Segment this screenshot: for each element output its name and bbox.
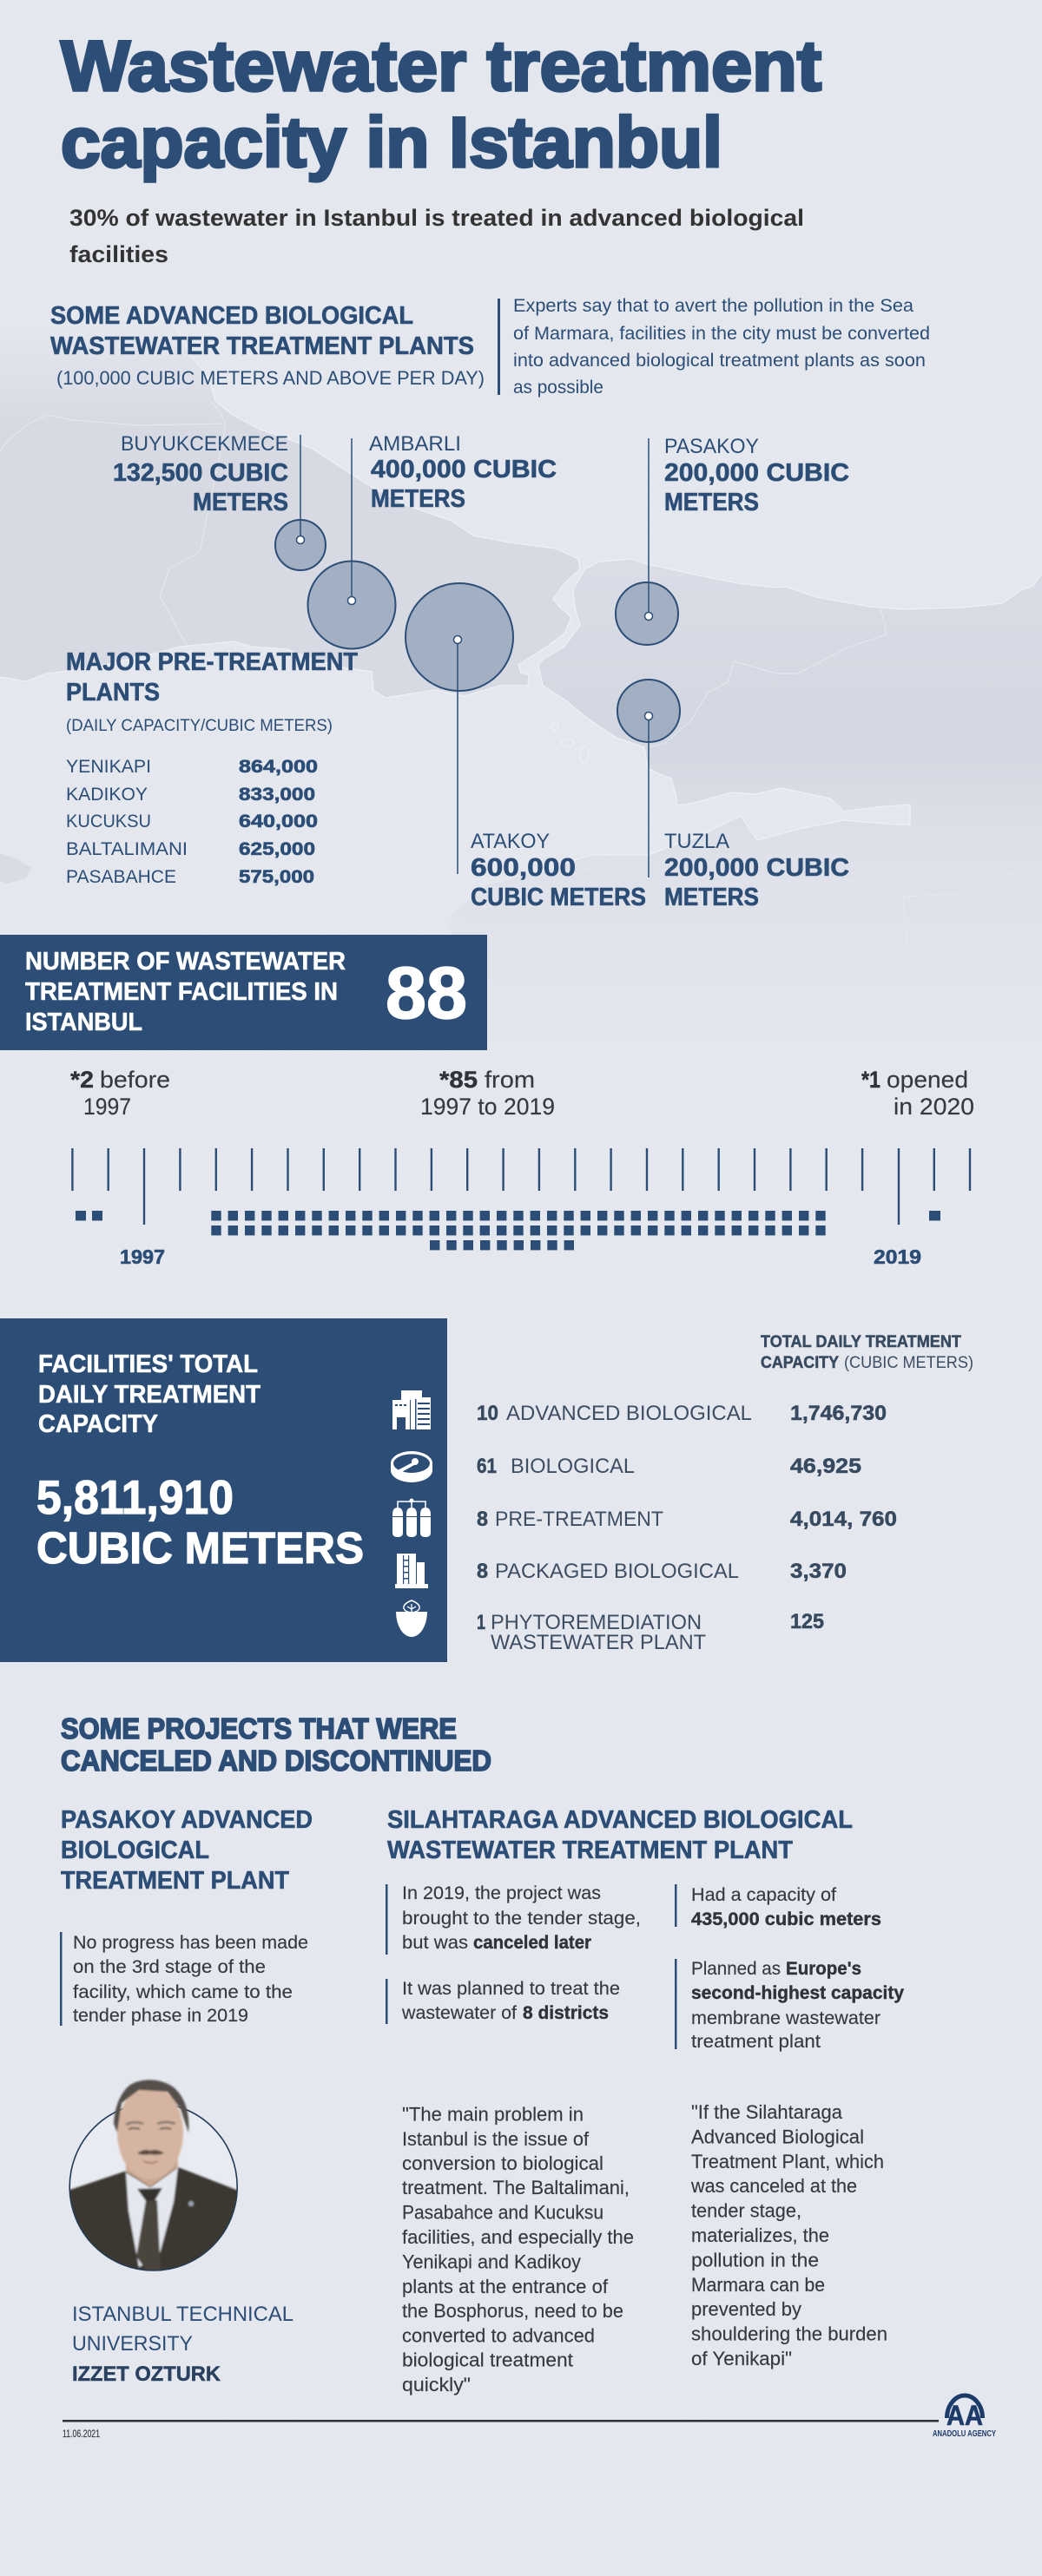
text: 8 districts: It was planned to treat the: [402, 1978, 620, 1999]
text: Europe's second-highest: [675, 1958, 904, 2052]
map: Istanbul region: [0, 321, 1042, 1059]
label: Atakoy: [471, 830, 646, 911]
heading: Silahtaraga plant: SILAHTARAGA ADVANCED BIOLOGICAL: [387, 1806, 853, 1834]
text: tender stage: but was: [402, 1932, 468, 1953]
icon: packaged biological tower: [395, 1554, 428, 1588]
text: Europe's second-highest: membrane wastewater: [691, 2008, 880, 2028]
label: Tuzla: TUZLA: [664, 830, 730, 853]
panel: Pasakoy project: [60, 1806, 313, 2026]
label: Pasakoy: 200,000 CUBIC: [664, 459, 849, 487]
label: 1 opened in 2020: in 2020: [894, 1094, 974, 1120]
panel: total daily capacity: CAPACITY: [38, 1410, 158, 1438]
quote: Silahtaraga plant: of Yenikapi": [691, 2348, 792, 2369]
quote: Silahtaraga plant: Advanced Biological: [691, 2126, 864, 2147]
table: plant capacities: [66, 757, 318, 887]
text: capacity: [675, 1884, 881, 1929]
heading: Silahtaraga plant: WASTEWATER TREATMENT PLANT: [387, 1837, 793, 1864]
heading: Pasakoy plant: [61, 1806, 313, 1895]
table: plant capacities: 575,000: [239, 867, 314, 887]
label: 2 before 1997: [70, 1067, 170, 1120]
heading: pre-treatment: [66, 648, 358, 735]
table: plant capacities: PASABAHCE: [66, 867, 176, 887]
label: 2 before 1997: before: [100, 1067, 170, 1093]
text: capacity: 435,000 cubic meters: [691, 1909, 881, 1929]
table header: total daily capacity: (CUBIC METERS): [844, 1353, 973, 1372]
callout: experts note: of Marmara, facilities in the city must be converted: [513, 323, 930, 344]
label: Tuzla: [664, 830, 849, 911]
callout: experts note: as possible: [513, 377, 603, 398]
label: Atakoy: 600,000: [471, 854, 576, 882]
table: plant capacities: BALTALIMANI: [66, 839, 188, 859]
date: 11.06.2021: [63, 2429, 100, 2440]
row: pre-treatment: [477, 1508, 897, 1531]
quote: conversion to biological treatment: "The main problem in: [402, 2103, 584, 2125]
label: Atakoy: ATAKOY: [471, 830, 550, 853]
heading: pre-treatment: MAJOR PRE-TREATMENT: [66, 648, 358, 676]
label: 2 before 1997: 1997: [83, 1094, 131, 1120]
heading: Pasakoy plant: PASAKOY ADVANCED: [61, 1806, 313, 1834]
label: Tuzla: 200,000 CUBIC: [664, 854, 849, 882]
title: capacity in Istanbul: [61, 103, 722, 182]
heading: canceled projects: CANCELED AND DISCONTINUED: [61, 1745, 491, 1777]
text: Europe's second-highest: Planned as: [691, 1958, 781, 1979]
heading: Pasakoy plant: TREATMENT PLANT: [61, 1867, 289, 1895]
quote: conversion to biological treatment: the Bosphorus, need to be: [402, 2300, 623, 2322]
table header: total daily capacity: [761, 1332, 973, 1372]
row: pre-treatment: PRE-TREATMENT: [495, 1508, 663, 1531]
table header: total daily capacity: CAPACITY: [761, 1353, 839, 1372]
person caption: UNIVERSITY: [72, 2332, 193, 2356]
quote: Silahtaraga plant: was canceled at the: [690, 2175, 857, 2197]
text: 8 districts: 8 districts: [523, 2002, 609, 2023]
heading: advanced biological plants: WASTEWATER TREATMENT PLANTS: [50, 332, 474, 360]
quote: conversion to biological treatment: Pasabahce and Kucuksu: [402, 2202, 603, 2224]
callout: experts note: [498, 295, 930, 398]
panel: number of facilities: TREATMENT FACILITIES IN: [25, 978, 338, 1006]
row: advanced biological: 10: [477, 1402, 498, 1425]
subtitle: [69, 205, 804, 267]
row: phytoremediation: PHYTOREMEDIATION: [491, 1611, 702, 1634]
figure: 5,811,910 cubic meters: 5,811,910: [36, 1470, 234, 1524]
row: packaged biological: PACKAGED BIOLOGICAL: [495, 1560, 739, 1583]
icon: biological tank: [391, 1451, 432, 1482]
row: phytoremediation: 1: [477, 1611, 485, 1634]
figure: 5,811,910 cubic meters: CUBIC METERS: [36, 1523, 364, 1573]
marker: Buyukcekmece: [275, 435, 326, 570]
square: 2020: [929, 1211, 940, 1220]
title: Wastewater treatment: [61, 27, 821, 106]
quote: conversion to biological treatment: treatment. The Baltalimani,: [402, 2177, 630, 2198]
text: Pasakoy progress: on the 3rd stage of the: [73, 1956, 266, 1977]
table: plant capacities: KADIKOY: [66, 785, 148, 805]
row: advanced biological: 1,746,730: [790, 1402, 887, 1425]
label: Buyukcekmece: METERS: [193, 489, 288, 516]
chart: timeline ticks and squares: [72, 1148, 970, 1268]
marker: Atakoy: [406, 583, 513, 874]
label: Buyukcekmece: BUYUKCEKMECE: [121, 432, 288, 456]
label: 1 opened in 2020: opened: [887, 1067, 968, 1093]
text: tender stage: In 2019, the project was: [402, 1883, 601, 1903]
portrait: Izzet Ozturk: [69, 2078, 238, 2271]
quote: Silahtaraga plant: tender stage,: [691, 2200, 801, 2222]
text: 8 districts: wastewater of: [401, 2002, 517, 2023]
row: biological: 46,925: [790, 1455, 861, 1478]
heading: advanced biological plants: SOME ADVANCED BIOLOGICAL: [50, 302, 413, 330]
row: packaged biological: [477, 1560, 847, 1583]
callout: experts note: Experts say that to avert the pollution in the Sea: [513, 295, 913, 316]
label: Ambarli: [369, 432, 557, 513]
label: 1 opened in 2020: *1: [861, 1067, 880, 1093]
quote: Silahtaraga plant: shouldering the burden: [691, 2323, 887, 2345]
label: Ambarli: AMBARLI: [369, 432, 461, 456]
quote: conversion to biological treatment: Yenikapi and Kadikoy: [402, 2251, 581, 2272]
quote: Silahtaraga plant: pollution in the: [691, 2249, 819, 2270]
label: 85 from 1997 to 2019: from: [485, 1067, 535, 1093]
table: plant capacities: YENIKAPI: [66, 757, 151, 777]
person caption: IZZET OZTURK: [72, 2362, 221, 2386]
quote: Silahtaraga plant: [690, 2101, 887, 2369]
row: biological: BIOLOGICAL: [511, 1455, 635, 1478]
label: Buyukcekmece: [113, 432, 288, 516]
panel: Silahtaraga project: [386, 1806, 904, 2052]
label: 2 before 1997: *2: [70, 1067, 94, 1093]
panel: total daily capacity: FACILITIES' TOTAL: [38, 1350, 258, 1378]
table: plant capacities: KUCUKSU: [66, 812, 151, 831]
row: phytoremediation: WASTEWATER PLANT: [491, 1631, 706, 1654]
quote: conversion to biological treatment: biological treatment: [402, 2349, 573, 2371]
subtitle: facilities: [69, 241, 168, 267]
text: Pasakoy progress: tender phase in 2019: [73, 2005, 248, 2026]
label: Tuzla: METERS: [664, 884, 759, 911]
text: Pasakoy progress: facility, which came to the: [73, 1981, 293, 2002]
label: Pasakoy: [664, 435, 849, 516]
subtitle: 30% of wastewater in Istanbul is treated in advanced biological: [69, 205, 804, 231]
row: biological: [477, 1455, 861, 1478]
text: tender stage: canceled later: [473, 1932, 592, 1953]
quote: conversion to biological treatment: plants at the entrance of: [402, 2276, 609, 2297]
text: Europe's second-highest: second-highest capacity: [691, 1982, 904, 2003]
year: 2019: 2019: [874, 1245, 921, 1268]
text: tender stage: [386, 1883, 641, 1955]
label: Buyukcekmece: 132,500 CUBIC: [113, 459, 288, 487]
person caption: [72, 2303, 293, 2386]
label: 85 from 1997 to 2019: 1997 to 2019: [420, 1094, 555, 1120]
heading: canceled projects: SOME PROJECTS THAT WERE: [61, 1712, 457, 1745]
panel: total daily capacity: [0, 1318, 447, 1662]
person caption: ISTANBUL TECHNICAL: [72, 2303, 293, 2326]
heading: canceled projects: [61, 1712, 491, 1777]
icon: advanced biological plant building: [392, 1390, 431, 1429]
panel: number of facilities: ISTANBUL: [25, 1009, 142, 1036]
label: Ambarli: 400,000 CUBIC: [371, 456, 557, 483]
heading: pre-treatment: (DAILY CAPACITY/CUBIC METERS): [66, 717, 333, 735]
table header: total daily capacity: TOTAL DAILY TREATMENT: [761, 1332, 961, 1351]
map markers: [275, 435, 680, 877]
marker: Pasakoy: [616, 438, 678, 645]
row: advanced biological: [477, 1402, 887, 1425]
label: Pasakoy: PASAKOY: [664, 435, 759, 458]
label: 85 from 1997 to 2019: *85: [439, 1067, 478, 1093]
label: Atakoy: CUBIC METERS: [471, 884, 646, 911]
logo: Anadolu Agency: AA: [946, 2400, 983, 2431]
quote: conversion to biological treatment: converted to advanced: [402, 2324, 595, 2347]
quote: conversion to biological treatment: Istanbul is the issue of: [402, 2128, 590, 2150]
quote: conversion to biological treatment: [402, 2103, 634, 2395]
text: Pasakoy progress: No progress has been made: [73, 1932, 308, 1953]
row: packaged biological: 8: [477, 1560, 488, 1583]
label: Pasakoy: METERS: [664, 489, 759, 516]
logo: Anadolu Agency: ANADOLU AGENCY: [933, 2428, 996, 2439]
label: Ambarli: METERS: [371, 485, 465, 513]
callout: experts note: into advanced biological treatment plants as soon: [513, 350, 926, 371]
year: 1997: 1997: [120, 1245, 165, 1268]
heading: Silahtaraga plant: [387, 1806, 853, 1864]
logo: Anadolu Agency: [933, 2395, 996, 2439]
quote: conversion to biological treatment: facilities, and especially the: [402, 2226, 634, 2248]
heading: advanced biological plants: [50, 302, 485, 389]
heading: advanced biological plants: (100,000 CUBIC METERS AND ABOVE PER DAY): [56, 367, 485, 389]
text: 8 districts: [386, 1978, 620, 2024]
panel: total daily capacity: DAILY TREATMENT: [38, 1381, 260, 1409]
number: 88: 88: [386, 952, 467, 1034]
row: pre-treatment: 4,014, 760: [790, 1508, 897, 1531]
squares: before 1997: [76, 1211, 102, 1220]
quote: Silahtaraga plant: prevented by: [691, 2298, 801, 2320]
marker: Ambarli: [307, 438, 396, 649]
heading: Pasakoy plant: BIOLOGICAL: [61, 1837, 209, 1864]
text: capacity: Had a capacity of: [691, 1884, 836, 1905]
title: [61, 27, 821, 182]
quote: Silahtaraga plant: "If the Silahtaraga: [691, 2101, 843, 2123]
quote: Silahtaraga plant: Treatment Plant, which: [691, 2151, 884, 2172]
table: plant capacities: 864,000: [239, 757, 318, 777]
text: Pasakoy progress: [60, 1932, 308, 2026]
quote: conversion to biological treatment: quickly": [402, 2374, 471, 2395]
row: packaged biological: 3,370: [790, 1560, 847, 1583]
marker: Tuzla: [617, 680, 680, 877]
icon: phytoremediation plant: [396, 1600, 427, 1637]
table: plant capacities: 625,000: [239, 839, 315, 859]
row: phytoremediation: 125: [790, 1610, 824, 1633]
row: advanced biological: ADVANCED BIOLOGICAL: [506, 1402, 752, 1425]
text: Europe's second-highest: treatment plant: [691, 2031, 821, 2052]
squares: 1997 to 2019: [211, 1211, 826, 1250]
figure: 5,811,910 cubic meters: [36, 1470, 364, 1573]
panel: number of facilities: NUMBER OF WASTEWATER: [25, 948, 346, 976]
row: phytoremediation: [477, 1610, 824, 1654]
row: pre-treatment: 8: [477, 1508, 488, 1531]
ticks: [72, 1148, 970, 1225]
panel: major pre-treatment plants: [66, 648, 358, 887]
footer rule: [63, 2420, 939, 2422]
table: plant capacities: 640,000: [239, 812, 318, 831]
table: plant capacities: 833,000: [239, 785, 315, 805]
label: 85 from 1997 to 2019: [420, 1067, 555, 1120]
icon: pre-treatment filters: [392, 1498, 431, 1537]
quote: conversion to biological treatment: conversion to biological: [402, 2152, 603, 2174]
quote: Silahtaraga plant: Marmara can be: [691, 2274, 825, 2296]
quote: Silahtaraga plant: materializes, the: [691, 2224, 829, 2246]
timeline labels: [70, 1067, 974, 1120]
text: tender stage: brought to the tender stage,: [402, 1908, 641, 1929]
row: biological: 61: [477, 1455, 497, 1478]
heading: pre-treatment: PLANTS: [66, 679, 160, 706]
text: Europe's second-highest: Europe's: [786, 1958, 861, 1979]
label: 1 opened in 2020: [861, 1067, 974, 1120]
panel: number of facilities: [0, 935, 487, 1050]
